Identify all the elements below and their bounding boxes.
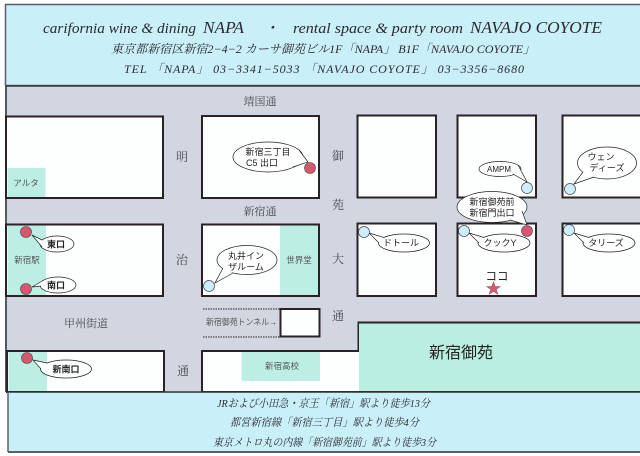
callout: Doutor: ドトール (383, 238, 419, 248)
city block: AMPM (458, 116, 536, 198)
callout: Doutor (358, 226, 430, 252)
callout: AMPM: AMPM (487, 165, 511, 174)
city block: Tully's (562, 224, 640, 296)
tunnel (203, 309, 320, 337)
text: Toei route: 都営新宿線「新宿三丁目」駅より徒歩4分 (230, 416, 421, 429)
callout: Cook Y: クックY (483, 238, 517, 248)
road label: Yasukuni-dori: 靖国通 (244, 94, 276, 108)
city block: Doutor (358, 224, 436, 296)
callout: Wendy's: ウェン (587, 152, 615, 162)
tunnel: 新宿御苑トンネル→ (206, 317, 277, 327)
heading: venue names (43, 18, 602, 37)
road label: Gyoen-odori: 苑 (332, 198, 344, 212)
landmark: Shinjuku station (8, 226, 46, 295)
marker: venue location (486, 271, 508, 294)
road label: Shinjuku-dori: 新宿通 (244, 204, 276, 218)
heading: venue names: carifornia wine & dining (43, 21, 197, 37)
callout: South exit (20, 277, 76, 294)
callout: East exit (20, 226, 74, 252)
road label: Gyoen-odori: 御 (332, 149, 344, 163)
heading: venue names: NAVAJO COYOTE (469, 18, 602, 37)
callout: Shinjuku-gyoenmae exit: 新宿門出口 (469, 207, 515, 218)
heading: venue names: rental space & party room (293, 21, 463, 37)
callout: Wendy's (564, 147, 636, 194)
callout: Shin-minami exit: 新南口 (52, 364, 80, 374)
city block: south left (7, 351, 164, 392)
callout: Wendy's: ディーズ (590, 162, 624, 173)
city block: top centre (358, 116, 436, 198)
landmark: Shinjuku station: 新宿駅 (14, 255, 40, 265)
callout: Shin-minami exit (22, 352, 92, 378)
callout: East exit: 東口 (47, 238, 65, 250)
panel: header (6, 4, 640, 86)
text: address: 東京都新宿区新宿2−4−2 カーサ御苑ビル1F「NAPA」 B1F「NAVAJO COYOTE」 (111, 42, 535, 56)
callout: Shinjuku-sanchome C5 exit (233, 142, 316, 174)
text: JR route: JRおよび小田急・京王「新宿」駅より徒歩13分 (217, 397, 432, 410)
landmark: Alta (8, 168, 46, 197)
city block: Shinjuku 3-chome (202, 116, 319, 198)
landmark: Shinjuku high school: 新宿高校 (265, 361, 299, 371)
city block: south centre and Shinjuku Gyoen (202, 322, 640, 392)
landmark: Shinjuku Gyoen park: 新宿御苑 (429, 344, 493, 362)
callout: Shinjuku-gyoenmae exit: 新宿御苑前 (469, 196, 515, 207)
callout: Tully's (564, 224, 635, 252)
callout: AMPM (479, 162, 532, 194)
panel: street map (6, 86, 640, 392)
landmark: Shinjuku Gyoen park (359, 324, 640, 391)
road label: Meiji-dori: 明 (176, 150, 188, 164)
callout: South exit: 南口 (47, 280, 65, 290)
city block: Shinjuku station (6, 224, 163, 296)
landmark: Alta: アルタ (13, 178, 39, 188)
heading: venue names: NAPA (202, 18, 245, 37)
road label: Koshu-kaido: 甲州街道 (64, 316, 108, 330)
road label: Meiji-dori: 治 (176, 253, 189, 267)
city block: venue (458, 224, 536, 296)
road label: Meiji-dori (176, 150, 189, 378)
callout: Tully's: タリーズ (588, 237, 624, 248)
road label: Gyoen-odori (332, 149, 344, 323)
callout: Shinjuku-sanchome C5 exit: 新宿三丁目 (245, 146, 291, 157)
callout: Cook Y (458, 226, 530, 252)
callout: Shinjuku-gyoenmae exit (457, 192, 532, 236)
road label: Meiji-dori: 通 (177, 364, 189, 378)
city block: top left (6, 116, 163, 198)
text: Metro route: 東京メトロ丸の内線「新宿御苑前」駅より徒歩3分 (213, 436, 438, 449)
callout: Shinjuku-sanchome C5 exit: C5 出口 (246, 157, 278, 168)
callout: Marui Inn the Room: ザルーム (228, 262, 264, 272)
callout: Marui Inn the Room: 丸井イン (228, 250, 264, 261)
landmark: Sekaido: 世界堂 (286, 255, 312, 265)
panel: access directions (8, 392, 640, 452)
road label: Gyoen-odori: 通 (332, 309, 344, 323)
heading: venue names: ・ (264, 21, 279, 37)
callout: Marui Inn the Room (204, 246, 277, 292)
city block: Marui (202, 224, 319, 296)
landmark: Shinjuku high school (242, 352, 320, 381)
text: telephone: TEL 「NAPA」 03−3341−5033 「NAVAJO COYOTE」 03−3356−8680 (124, 62, 524, 76)
road label: Gyoen-odori: 大 (332, 251, 344, 266)
city block: Wendy's (562, 116, 640, 198)
marker: venue location: ココ (486, 271, 508, 283)
